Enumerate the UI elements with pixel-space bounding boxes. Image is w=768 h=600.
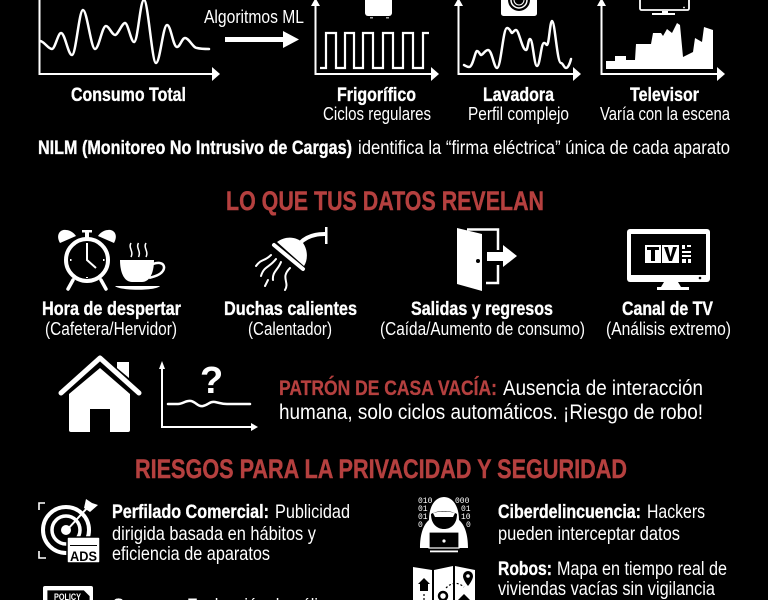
icon: door with arrow xyxy=(457,228,517,291)
panel: total consumption chart: Consumo Total xyxy=(71,84,186,106)
panel: departures and returns: (Caída/Aumento de consumo) xyxy=(380,318,585,339)
icon: hacker with laptop: 01 xyxy=(418,513,428,522)
icon: hacker with laptop xyxy=(418,497,471,552)
panel: commercial profiling: Perfilado Comercial: xyxy=(112,501,269,523)
chart: flat consumption xyxy=(159,360,258,431)
panel: insurance xyxy=(43,586,343,600)
panel: burglary: Robos: xyxy=(498,558,552,580)
panel: cybercrime: Hackers xyxy=(647,501,705,523)
heading: what your data reveals: LO QUE TUS DATOS REVELAN xyxy=(226,186,544,216)
panel: wake-up time: Hora de despertar xyxy=(42,298,181,320)
icon: washing machine xyxy=(501,0,537,16)
panel: hot showers xyxy=(224,227,357,339)
text block: empty house description: PATRÓN DE CASA VACÍA: xyxy=(279,376,497,400)
panel: departures and returns: Salidas y regresos xyxy=(411,298,553,320)
panel: burglary: Mapa en tiempo real de xyxy=(557,558,727,580)
text block: empty house description: Ausencia de interacción xyxy=(503,377,703,400)
panel: departures and returns xyxy=(380,228,585,339)
panel: commercial profiling: dirigida basada en hábitos y xyxy=(112,523,316,545)
panel: commercial profiling xyxy=(39,499,350,565)
text block: empty house description: humana, solo ciclos automáticos. ¡Riesgo de robo! xyxy=(279,401,703,424)
panel: fridge chart xyxy=(311,0,439,124)
panel: TV channel: (Análisis extremo) xyxy=(606,318,731,339)
panel: burglary: viviendas vacías sin vigilancia xyxy=(498,578,715,600)
panel: commercial profiling: Publicidad xyxy=(275,501,350,523)
panel: washing machine chart: Perfil complejo xyxy=(468,103,569,124)
icon: fridge xyxy=(365,0,392,18)
icon: target with ads: ADS xyxy=(70,548,97,564)
icon: shower head xyxy=(256,227,328,290)
icon: television with logo xyxy=(627,229,710,290)
heading: privacy and security risks: RIESGOS PARA LA PRIVACIDAD Y SEGURIDAD xyxy=(135,454,627,484)
icon: hacker with laptop: 0 xyxy=(466,521,471,530)
chart: flat consumption: ? xyxy=(200,360,223,402)
icon: hacker with laptop: 01 xyxy=(461,505,471,514)
panel: total consumption chart xyxy=(40,0,220,106)
icon: policy document xyxy=(43,586,93,600)
panel: empty house pattern xyxy=(61,358,703,432)
icon: hacker with laptop: 0 xyxy=(418,521,423,530)
arrow: machine learning algorithms: Algoritmos ML xyxy=(204,6,304,27)
panel: commercial profiling: eficiencia de aparatos xyxy=(112,543,270,565)
panel: washing machine chart: Lavadora xyxy=(483,84,554,106)
panel: TV channel: Canal de TV xyxy=(622,298,713,320)
panel: cybercrime xyxy=(418,497,705,552)
icon: television xyxy=(640,0,689,15)
text block: empty house description xyxy=(279,376,703,424)
panel: television chart: Televisor xyxy=(630,84,699,106)
icon: steaming coffee cup xyxy=(115,243,164,290)
panel: television chart: Varía con la escena xyxy=(600,103,731,124)
text block: NILM definition: NILM (Monitoreo No Intrusivo de Cargas) xyxy=(38,137,352,159)
panel: cybercrime: Ciberdelincuencia: xyxy=(498,501,641,523)
icon: hacker with laptop: 10 xyxy=(461,513,471,522)
icon: house xyxy=(61,358,139,432)
panel: washing machine chart xyxy=(454,0,581,124)
panel: wake-up time: (Cafetera/Hervidor) xyxy=(45,318,177,339)
arrow: machine learning algorithms xyxy=(204,6,304,48)
panel: hot showers: (Calentador) xyxy=(248,318,332,339)
panel: wake-up time xyxy=(42,230,181,339)
text block: NILM definition xyxy=(38,137,730,159)
icon: hacker with laptop: 01 xyxy=(418,505,428,514)
panel: hot showers: Duchas calientes xyxy=(224,298,357,320)
panel: cybercrime: pueden interceptar datos xyxy=(498,523,680,545)
icon: alarm clock xyxy=(58,230,116,289)
icon: target with ads xyxy=(39,499,100,564)
panel: burglary xyxy=(413,558,727,600)
panel: fridge chart: Frigorífico xyxy=(337,84,416,106)
icon: map with route xyxy=(413,566,475,600)
icon: hacker with laptop: 000 xyxy=(455,497,470,506)
panel: TV channel xyxy=(606,229,731,339)
icon: hacker with laptop: 010 xyxy=(418,497,433,506)
panel: television chart xyxy=(597,0,731,124)
panel: fridge chart: Ciclos regulares xyxy=(323,103,431,124)
